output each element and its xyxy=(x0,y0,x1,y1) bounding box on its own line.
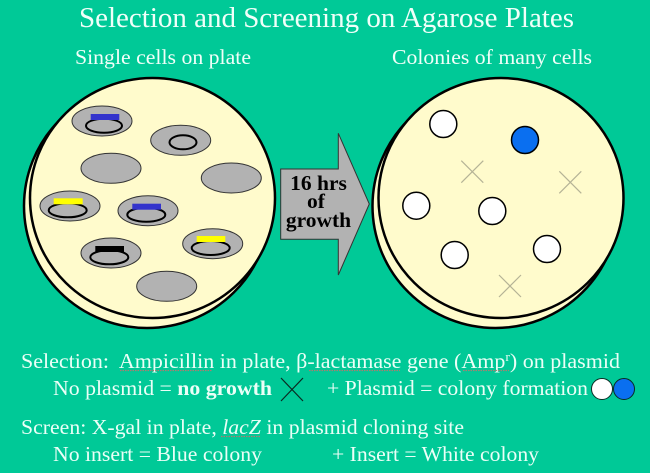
heading: single cells: Single cells on plate xyxy=(75,45,251,69)
selection line 1: r xyxy=(505,349,511,364)
selection line 2, no plasmid: No plasmid = no growth xyxy=(53,376,272,400)
selection line 1: Selection: Ampicillin in plate, β-lactamase gene (Amp xyxy=(21,349,483,373)
spell-check underline xyxy=(221,436,260,438)
screen line 2, plus insert: + Insert = White colony xyxy=(332,442,540,466)
cell with yellow insert plasmid xyxy=(40,191,100,221)
white colony xyxy=(430,110,457,138)
cell with empty plasmid xyxy=(151,125,211,155)
white colony xyxy=(479,198,506,224)
screen line 2, no insert: No insert = Blue colony xyxy=(53,442,263,466)
icon: blue colony xyxy=(614,378,634,400)
screen line 1: Screen: X-gal in plate, lacZ in plasmid cloning site xyxy=(21,415,464,439)
cell without plasmid xyxy=(81,153,141,183)
panel: right agar plate with colonies xyxy=(372,78,624,328)
cell with yellow insert plasmid xyxy=(183,229,243,259)
no growth mark xyxy=(559,171,581,193)
blue colony xyxy=(512,126,538,154)
selection line 1: ) on plasmid xyxy=(510,349,621,373)
arrow: 16 hrs of growth: of xyxy=(307,189,326,213)
arrow: 16 hrs of growth xyxy=(281,133,369,275)
cell with blue insert plasmid xyxy=(72,106,132,136)
icon: dark cross xyxy=(281,378,303,401)
cell without plasmid xyxy=(201,163,261,193)
selection line 2, plus plasmid: + Plasmid = colony formation xyxy=(327,376,589,400)
cell without plasmid xyxy=(137,271,197,301)
arrow: 16 hrs of growth: growth xyxy=(286,208,351,232)
text block: selection xyxy=(21,349,634,401)
no growth mark xyxy=(461,161,483,183)
icon: white colony xyxy=(592,378,612,400)
white colony xyxy=(441,242,468,268)
white colony xyxy=(534,236,560,262)
no growth mark xyxy=(499,275,521,297)
title: Selection and Screening on Agarose Plates xyxy=(79,2,574,34)
cell with blue insert plasmid xyxy=(118,196,178,226)
arrow: 16 hrs of growth: 16 hrs xyxy=(290,171,347,195)
white colony xyxy=(403,192,430,219)
cell with black insert plasmid xyxy=(81,238,141,268)
spell-check underlines xyxy=(120,370,509,372)
heading: colonies: Colonies of many cells xyxy=(392,45,592,69)
text block: screen xyxy=(21,415,540,466)
panel: left agar plate with single cells xyxy=(24,78,275,328)
